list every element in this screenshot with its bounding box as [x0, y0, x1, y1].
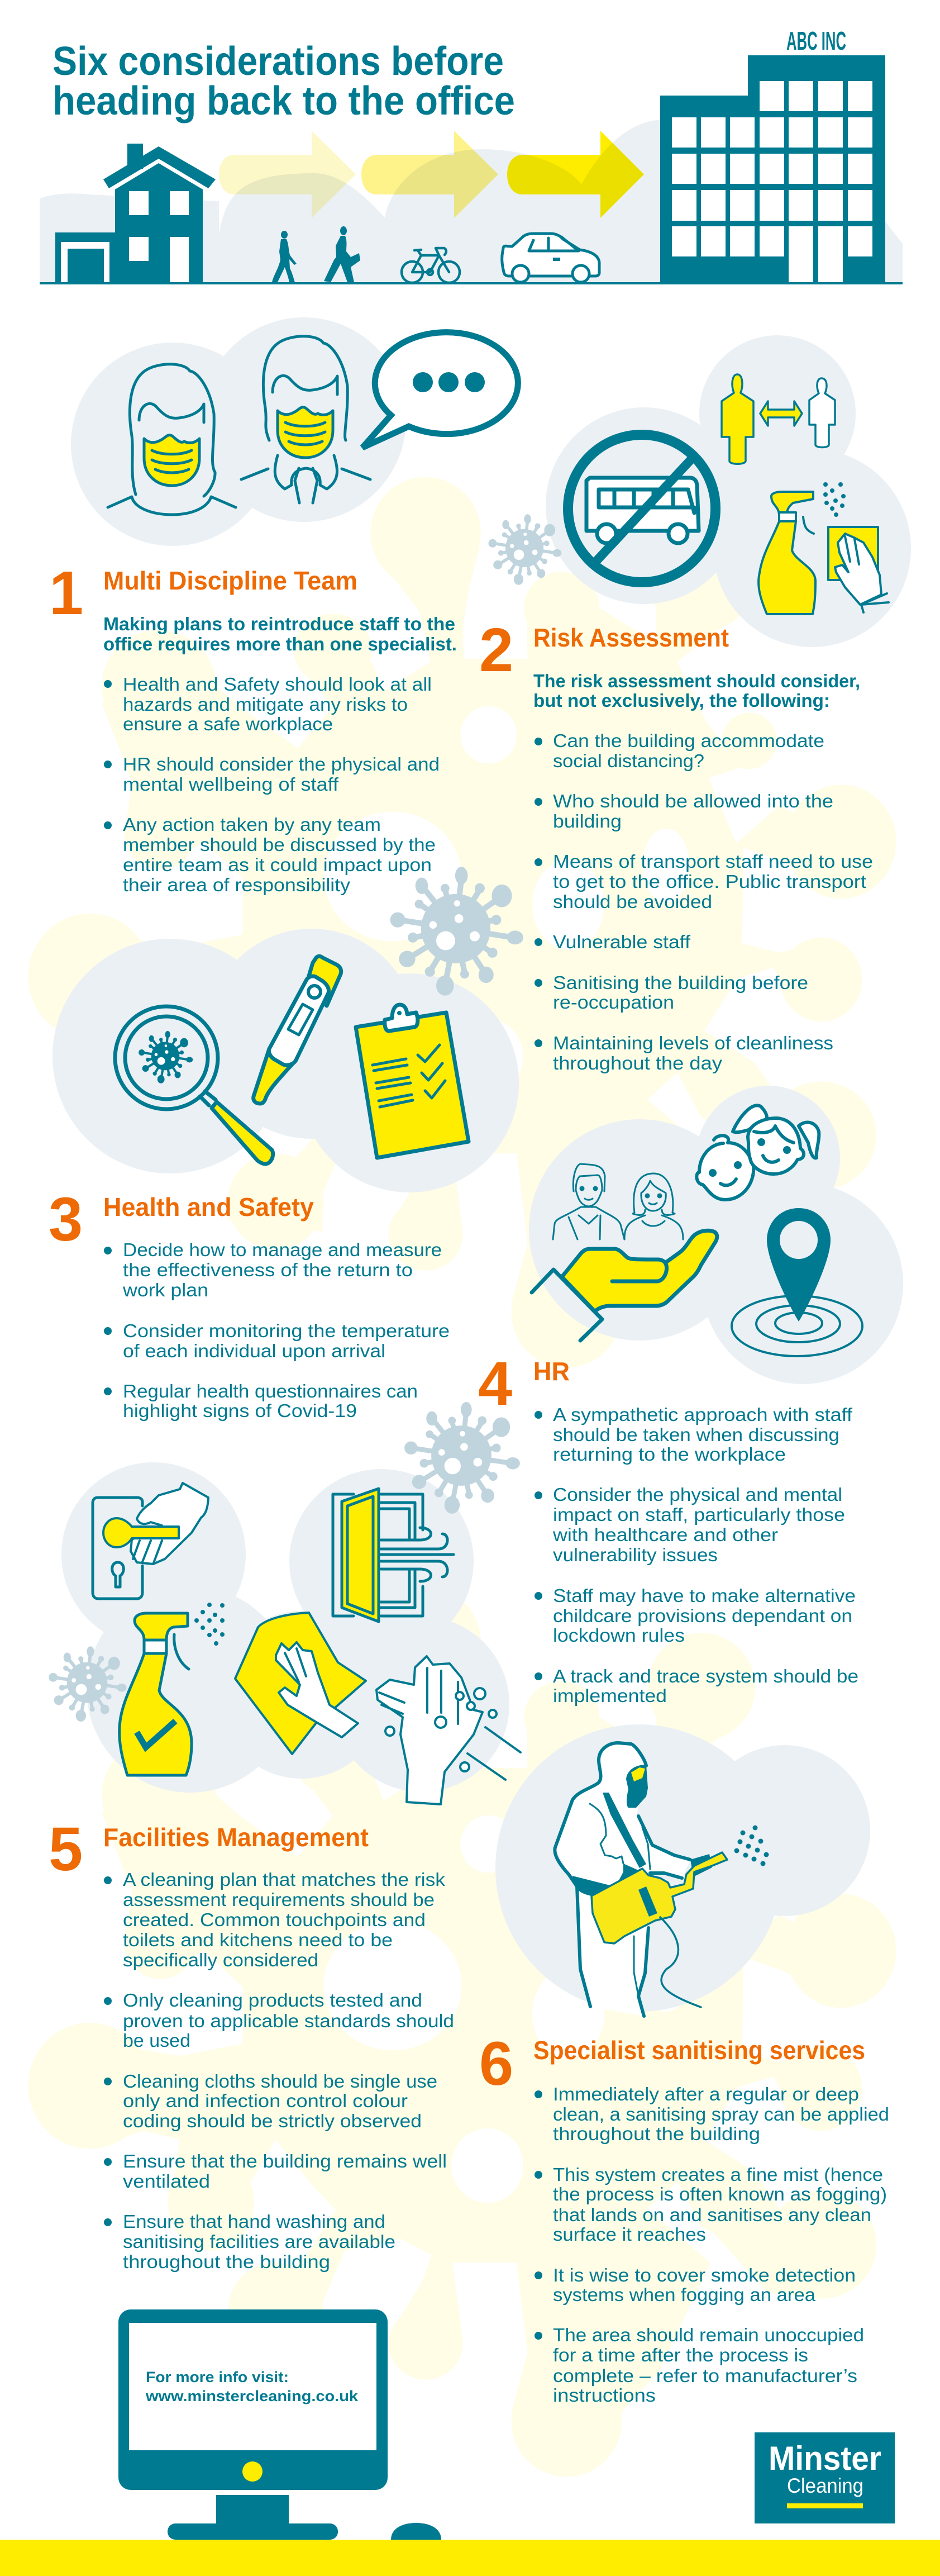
bullet list: ventilated — [123, 2171, 210, 2192]
bicycle icon — [402, 248, 460, 283]
bullet list: hazards and mitigate any risks to — [123, 694, 408, 715]
bullet list: coding should be strictly observed — [123, 2111, 422, 2131]
icon: social distancing — [722, 374, 835, 464]
house icon — [55, 144, 216, 282]
icon: virus large — [390, 867, 523, 996]
monitor text: www.minstercleaning.co.uk — [145, 2388, 359, 2404]
bullet list: Means of transport staff need to use — [553, 851, 873, 872]
section 1: multi discipline team — [49, 559, 457, 895]
icon: no bus sign — [568, 435, 715, 582]
bullet list — [104, 1239, 450, 1421]
computer mouse — [391, 2523, 441, 2540]
office building — [660, 55, 885, 282]
bullet list: throughout the building — [553, 2123, 760, 2144]
bullet list: vulnerability issues — [553, 1544, 718, 1565]
section 4: HR — [478, 1349, 858, 1706]
title: Six considerations before — [53, 39, 504, 84]
bullet list: Maintaining levels of cleanliness — [553, 1033, 833, 1053]
lead paragraph: Making plans to reintroduce staff to the — [103, 614, 455, 634]
heading: Multi Discipline Team — [103, 566, 357, 595]
bullet list: throughout the day — [553, 1053, 723, 1073]
icon: woman with mask — [108, 364, 236, 515]
bullet list: systems when fogging an area — [553, 2284, 816, 2305]
footer bar — [0, 2540, 940, 2576]
bullet list: toilets and kitchens need to be — [123, 1929, 393, 1950]
panel: sanitising operative illustration — [495, 1724, 870, 2016]
bullet list: A cleaning plan that matches the risk — [123, 1869, 446, 1890]
bullet list: A track and trace system should be — [553, 1666, 858, 1686]
bullet list: lockdown rules — [553, 1625, 685, 1646]
icon: cloth and hand — [235, 1613, 366, 1754]
bullet list — [535, 1404, 858, 1706]
panel: health and safety illustration — [53, 929, 519, 1192]
ground line — [40, 282, 903, 284]
lead paragraph: office requires more than one specialist. — [103, 634, 457, 654]
skyline hills — [40, 120, 903, 282]
icon: man with mask — [241, 336, 370, 503]
heading: Risk Assessment — [533, 623, 729, 652]
icon: virus left — [49, 1646, 127, 1722]
monitor text — [145, 2369, 359, 2404]
bullet list: that lands on and sanitises any clean — [553, 2204, 871, 2225]
panel: team illustration — [71, 317, 518, 546]
panel: HR illustration — [529, 1086, 903, 1384]
bullet list: Can the building accommodate — [553, 730, 824, 751]
number 2: 2 — [479, 616, 513, 685]
icon: magnifying glass with virus — [115, 1006, 273, 1164]
icon: adult couple — [553, 1164, 683, 1239]
section 6: specialist sanitising services — [479, 2030, 889, 2406]
bullet list: mental wellbeing of staff — [123, 774, 339, 795]
icon: spray bottle and cloth — [758, 482, 889, 614]
bullet list — [535, 2084, 889, 2406]
panel: risk illustration — [546, 335, 911, 647]
monitor text: For more info visit: — [146, 2369, 289, 2385]
bullet list: re-occupation — [553, 992, 674, 1013]
bullet list: their area of responsibility — [123, 874, 351, 895]
bullet list: proven to applicable standards should — [123, 2011, 454, 2031]
number 5: 5 — [49, 1815, 83, 1884]
arrow two — [361, 131, 498, 218]
car icon — [502, 234, 599, 282]
bullet list: entire team as it could impact upon — [123, 854, 432, 875]
bullet list: Regular health questionnaires can — [123, 1381, 418, 1401]
background virus silhouette upper — [27, 477, 896, 1367]
icon: clipboard checklist — [356, 1005, 469, 1158]
bullet list: clean, a sanitising spray can be applied — [553, 2104, 889, 2125]
section 2: risk assessment — [479, 616, 873, 1073]
section 5: facilities management — [49, 1815, 454, 2272]
icon: spray bottle with tick — [120, 1603, 225, 1775]
bullet list: throughout the building — [123, 2251, 330, 2272]
lead paragraph: The risk assessment should consider, — [533, 671, 860, 691]
bullet list: Consider monitoring the temperature — [123, 1320, 450, 1341]
bullet list: work plan — [122, 1280, 208, 1300]
bullet list: complete – refer to manufacturer’s — [553, 2365, 857, 2386]
lead paragraph: but not exclusively, the following: — [533, 690, 830, 711]
bullet list: A sympathetic approach with staff — [553, 1404, 853, 1425]
bullet list: only and infection control colour — [123, 2090, 408, 2111]
bullet list: Decide how to manage and measure — [123, 1239, 442, 1260]
bullet list: building — [553, 811, 622, 831]
background virus silhouette lower — [27, 1586, 896, 2477]
bullet list: This system creates a fine mist (hence — [553, 2164, 883, 2185]
walking woman — [272, 231, 297, 282]
bullet list: assessment requirements should be — [123, 1889, 435, 1910]
bullet list: with healthcare and other — [552, 1524, 778, 1545]
icon: baby and girl faces — [696, 1105, 819, 1200]
bullet list: specifically considered — [123, 1950, 318, 1970]
bullet list: childcare provisions dependant on — [553, 1605, 852, 1626]
icon: virus small — [489, 514, 561, 585]
heading: Facilities Management — [103, 1823, 369, 1852]
company sign: ABC INC — [786, 26, 846, 55]
bullet list: ensure a safe workplace — [123, 714, 333, 734]
arrow one — [219, 131, 356, 218]
icon: door handle — [93, 1483, 208, 1599]
bullet list: be used — [123, 2030, 190, 2051]
icon: virus medium — [404, 1402, 520, 1514]
bullet list — [104, 674, 440, 895]
bullet list: Health and Safety should look at all — [123, 674, 432, 695]
title — [53, 39, 515, 123]
lead paragraph — [533, 671, 860, 711]
bullet list: impact on staff, particularly those — [553, 1504, 845, 1525]
bullet list: Immediately after a regular or deep — [553, 2084, 859, 2104]
bullet list: the effectiveness of the return to — [123, 1260, 413, 1280]
bullet list: Who should be allowed into the — [553, 791, 833, 811]
icon: speech bubble — [362, 332, 518, 448]
bullet list: surface it reaches — [553, 2224, 706, 2245]
number 4: 4 — [478, 1349, 512, 1418]
logo: Minster Cleaning: Cleaning — [787, 2474, 863, 2497]
bullet list: HR should consider the physical and — [123, 754, 440, 774]
bullet list — [104, 1869, 454, 2272]
bullet list: Sanitising the building before — [553, 972, 808, 993]
bullet list: Vulnerable staff — [553, 931, 691, 952]
bullet list: Staff may have to make alternative — [553, 1585, 856, 1606]
number 1: 1 — [49, 559, 83, 628]
bullet list: Ensure that the building remains well — [123, 2151, 447, 2171]
bullet list: highlight signs of Covid-19 — [123, 1400, 357, 1421]
bullet list: Only cleaning products tested and — [123, 1990, 422, 2011]
heading: Health and Safety — [103, 1192, 314, 1222]
number 6: 6 — [479, 2030, 513, 2098]
bullet list: for a time after the process is — [553, 2345, 808, 2365]
icon: open window with breeze — [333, 1489, 454, 1622]
bullet list: Consider the physical and mental — [553, 1484, 842, 1505]
heading: Specialist sanitising services — [533, 2036, 865, 2065]
bullet list — [535, 730, 873, 1073]
title: heading back to the office — [53, 79, 515, 123]
bullet list: Any action taken by any team — [123, 814, 381, 835]
walking man with briefcase — [324, 226, 360, 282]
bullet list: The area should remain unoccupied — [553, 2325, 864, 2345]
bullet list: should be avoided — [553, 891, 712, 912]
bullet list: implemented — [553, 1685, 667, 1706]
bullet list: Cleaning cloths should be single use — [123, 2071, 437, 2092]
icon: person in protective suit with fogging machine — [555, 1743, 769, 2016]
header illustration — [40, 55, 903, 284]
bullet list: should be taken when discussing — [553, 1424, 839, 1445]
bullet list: returning to the workplace — [553, 1444, 786, 1465]
bullet list: It is wise to cover smoke detection — [553, 2265, 856, 2285]
bullet list: sanitising facilities are available — [123, 2231, 395, 2252]
heading: HR — [533, 1357, 570, 1386]
bullet list: created. Common touchpoints and — [123, 1909, 426, 1930]
bullet list: instructions — [553, 2385, 656, 2406]
bullet list: Ensure that hand washing and — [123, 2211, 385, 2232]
lead paragraph — [103, 614, 457, 654]
icon: washing hands — [376, 1656, 521, 1804]
icon: thermometer — [254, 956, 341, 1104]
computer monitor — [118, 2309, 388, 2540]
logo: Minster Cleaning — [755, 2432, 895, 2523]
bullet list: to get to the office. Public transport — [553, 871, 866, 892]
arrow three — [507, 131, 644, 218]
section 3: health and safety — [49, 1185, 450, 1421]
bullet list: member should be discussed by the — [123, 834, 436, 855]
bullet list: the process is often known as fogging) — [553, 2184, 887, 2204]
bullet list: of each individual upon arrival — [123, 1341, 385, 1361]
icon: cupped hand — [532, 1230, 717, 1341]
logo: Minster Cleaning: Minster — [769, 2440, 881, 2477]
icon: location pin on target — [732, 1208, 862, 1356]
number 3: 3 — [49, 1185, 83, 1254]
bullet list: social distancing? — [553, 750, 704, 771]
panel: facilities illustration — [61, 1462, 521, 1804]
